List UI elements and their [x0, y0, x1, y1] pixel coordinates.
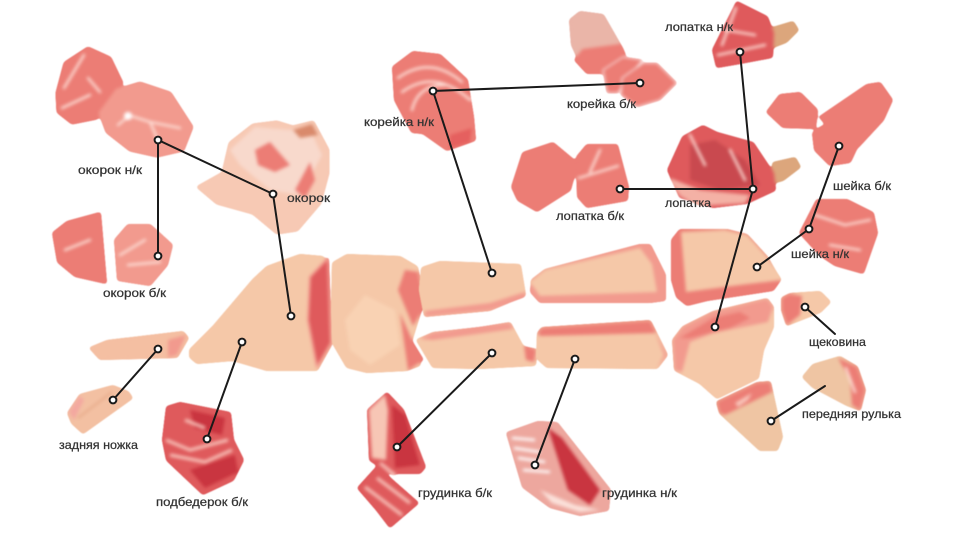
- cut: front trotter on carcass: [717, 382, 782, 450]
- label: ham: окорок: [287, 191, 331, 205]
- cut: boneless ham: [53, 213, 172, 285]
- label: neck b/k: шейка б/к: [833, 179, 892, 193]
- label: loin n/k: корейка н/к: [364, 115, 435, 129]
- label: ham b/k: окорок б/к: [103, 286, 167, 300]
- cut: whole ham: [198, 122, 328, 233]
- cut: bone-in neck: [800, 200, 877, 273]
- cut: whole shoulder: [668, 126, 800, 207]
- connector: neck: [754, 143, 842, 270]
- label: belly n/k: грудинка н/к: [602, 486, 678, 500]
- connector: front shank: [768, 386, 825, 424]
- label: shoulder n/k: лопатка н/к: [665, 20, 734, 34]
- connector: hind foot: [110, 346, 161, 403]
- connector: shoulder: [617, 49, 756, 330]
- cut: hind foot lower: [68, 386, 132, 433]
- label: belly b/k: грудинка б/к: [418, 486, 493, 500]
- cut: shoulder upper part: [672, 230, 782, 305]
- cut: boneless shoulder: [512, 143, 628, 211]
- cut: ham slices top left: [57, 48, 192, 156]
- connector: cheek: [802, 304, 835, 334]
- cut: boneless belly: [358, 393, 425, 527]
- connector: boneless belly: [394, 350, 495, 450]
- cut: shoulder lower part: [673, 299, 773, 398]
- connector: loin: [430, 80, 643, 276]
- label: shoulder: лопатка: [665, 196, 711, 210]
- cut: ham main piece: [190, 255, 332, 370]
- label: front shank: передняя рулька: [802, 407, 901, 421]
- cut: boneless neck: [767, 83, 892, 165]
- label: ham n/k: окорок н/к: [78, 163, 143, 177]
- label: cheek: щековина: [809, 335, 866, 349]
- label: flank b/k: подбедерок б/к: [156, 495, 249, 509]
- cut: cheek: [782, 292, 830, 325]
- label: shoulder b/k: лопатка б/к: [556, 209, 625, 223]
- connector: flank: [204, 339, 245, 442]
- labels: [59, 20, 901, 509]
- cut: hind foot upper: [90, 332, 188, 359]
- cut: bone-in belly: [507, 422, 610, 515]
- cut: bone-in shoulder slice: [713, 2, 798, 67]
- label: hind foot: задняя ножка: [59, 438, 138, 452]
- connector: bone-in belly: [532, 356, 578, 468]
- label: neck n/k: шейка н/к: [791, 247, 850, 261]
- cut: lower loin section: [417, 323, 537, 368]
- connector: ham: [155, 137, 294, 319]
- cut: bone-in loin: [393, 52, 475, 150]
- cut: upper belly section: [530, 245, 665, 302]
- label: loin b/k: корейка б/к: [567, 97, 637, 111]
- cut: middle loin block: [332, 255, 425, 372]
- cut: boneless flank: [163, 403, 243, 494]
- cut: lower belly section: [537, 321, 667, 368]
- cut: boneless loin: [570, 12, 677, 107]
- cut: front shank: [803, 357, 865, 410]
- cut: loin section: [420, 262, 525, 316]
